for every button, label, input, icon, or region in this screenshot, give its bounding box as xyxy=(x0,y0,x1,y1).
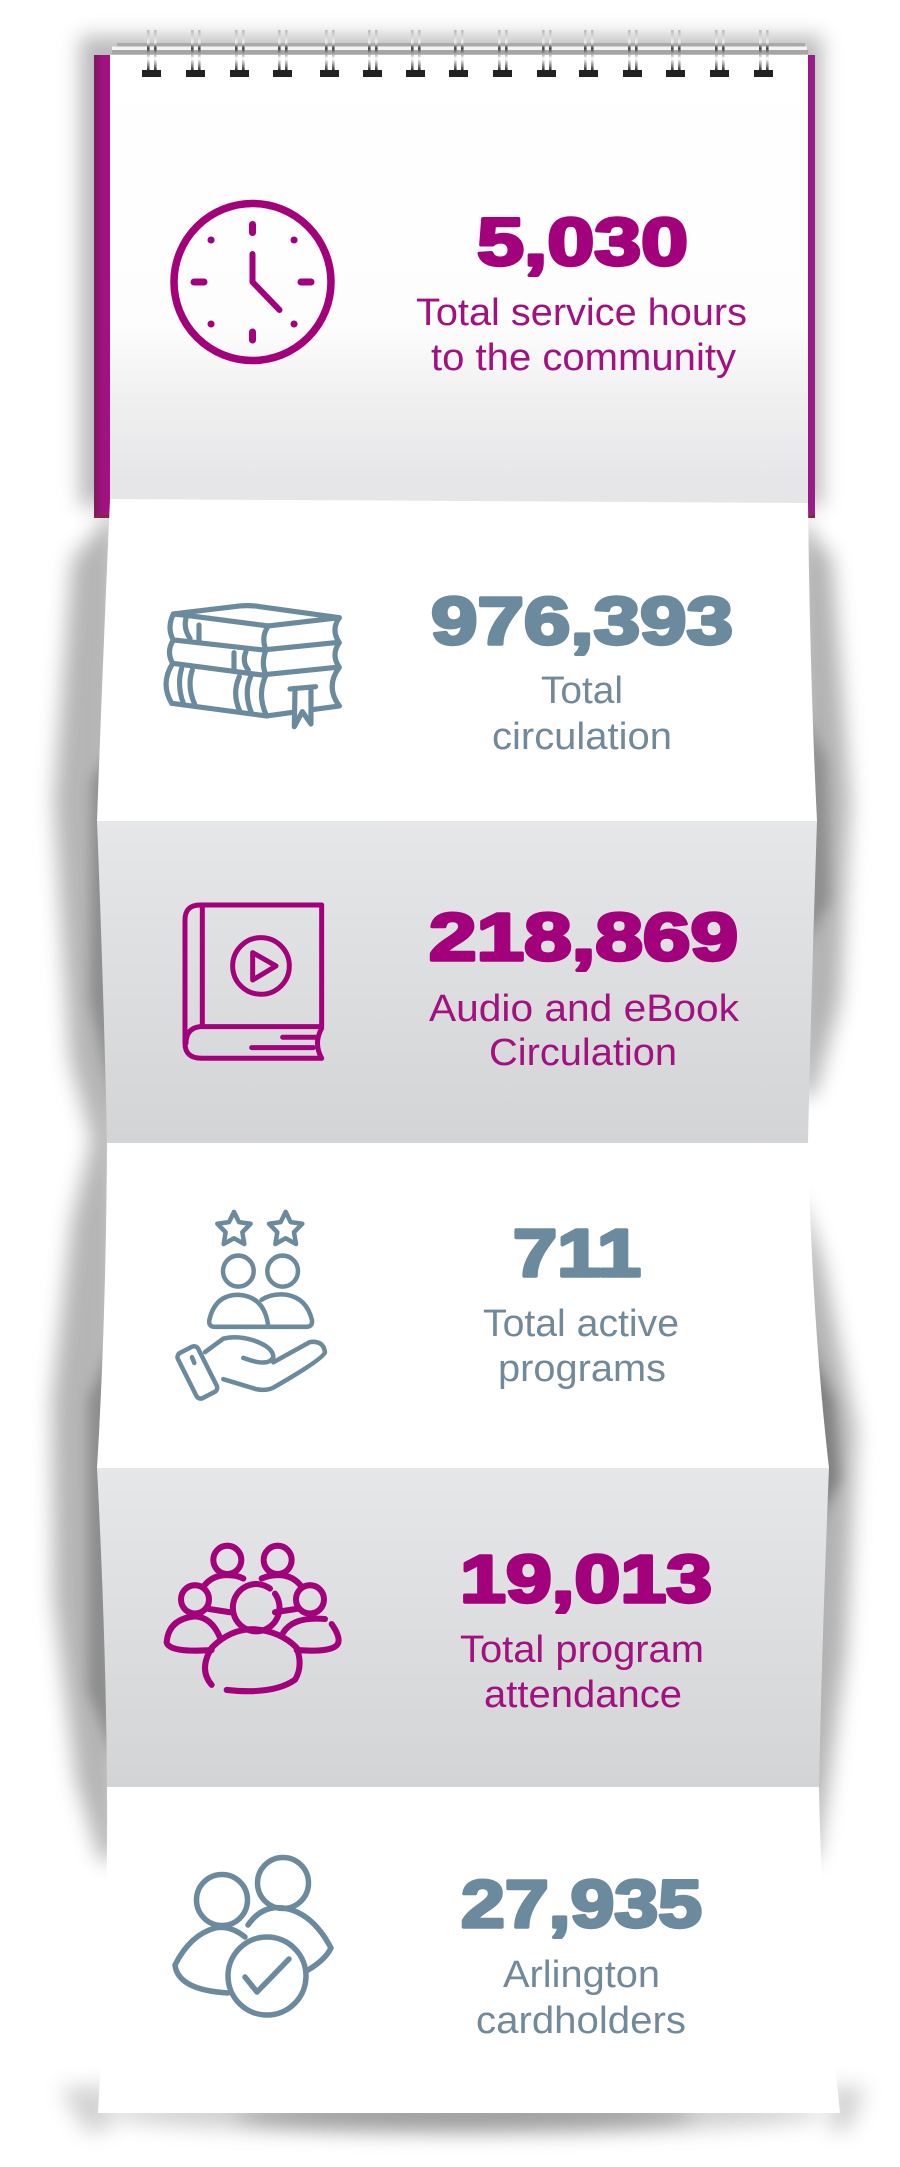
label: total active programs xyxy=(483,1303,679,1390)
label: arlington cardholders: cardholders xyxy=(476,2000,686,2042)
label: total active programs: programs xyxy=(498,1348,666,1390)
label: arlington cardholders xyxy=(476,1954,686,2042)
value: 711: 711 xyxy=(513,1216,641,1291)
value: 976,393: 976,393 xyxy=(431,584,733,659)
icon: clock xyxy=(174,204,331,360)
value: 27,935: 27,935 xyxy=(461,1867,702,1942)
panel: audio and ebook circulation xyxy=(97,821,817,1143)
label: total circulation xyxy=(492,670,672,758)
icon: hand holding people xyxy=(176,1212,325,1400)
panel: total program attendance xyxy=(97,1468,829,1787)
label: total circulation: Total xyxy=(541,670,623,712)
panel: total active programs xyxy=(97,1143,829,1468)
panel: total circulation xyxy=(97,499,817,821)
value: 218,869: 218,869 xyxy=(429,900,738,975)
panel: arlington cardholders xyxy=(98,1787,840,2113)
label: audio and ebook circulation: Audio and eBook xyxy=(429,988,740,1030)
icon: audio book xyxy=(185,905,322,1058)
label: audio and ebook circulation: Circulation xyxy=(489,1032,677,1074)
label: total circulation: circulation xyxy=(492,716,672,758)
icon: group of people xyxy=(167,1546,339,1691)
icon: cardholders with check mark xyxy=(175,1858,331,2015)
spiral binding xyxy=(112,30,808,77)
purple back cover xyxy=(94,55,815,518)
label: total program attendance: Total program xyxy=(460,1629,704,1671)
label: total service hours xyxy=(416,292,747,379)
value: 5,030: 5,030 xyxy=(477,205,688,280)
value: 19,013: 19,013 xyxy=(460,1542,712,1617)
label: arlington cardholders: Arlington xyxy=(503,1954,660,1996)
icon: stack of books xyxy=(166,606,339,727)
label: total program attendance xyxy=(460,1629,704,1716)
label: audio and ebook circulation xyxy=(429,988,740,1074)
label: total program attendance: attendance xyxy=(484,1674,682,1716)
panel: service hours xyxy=(110,55,808,504)
label: total service hours: Total service hours xyxy=(416,292,747,334)
label: total active programs: Total active xyxy=(483,1303,679,1345)
label: total service hours: to the community xyxy=(431,337,736,379)
